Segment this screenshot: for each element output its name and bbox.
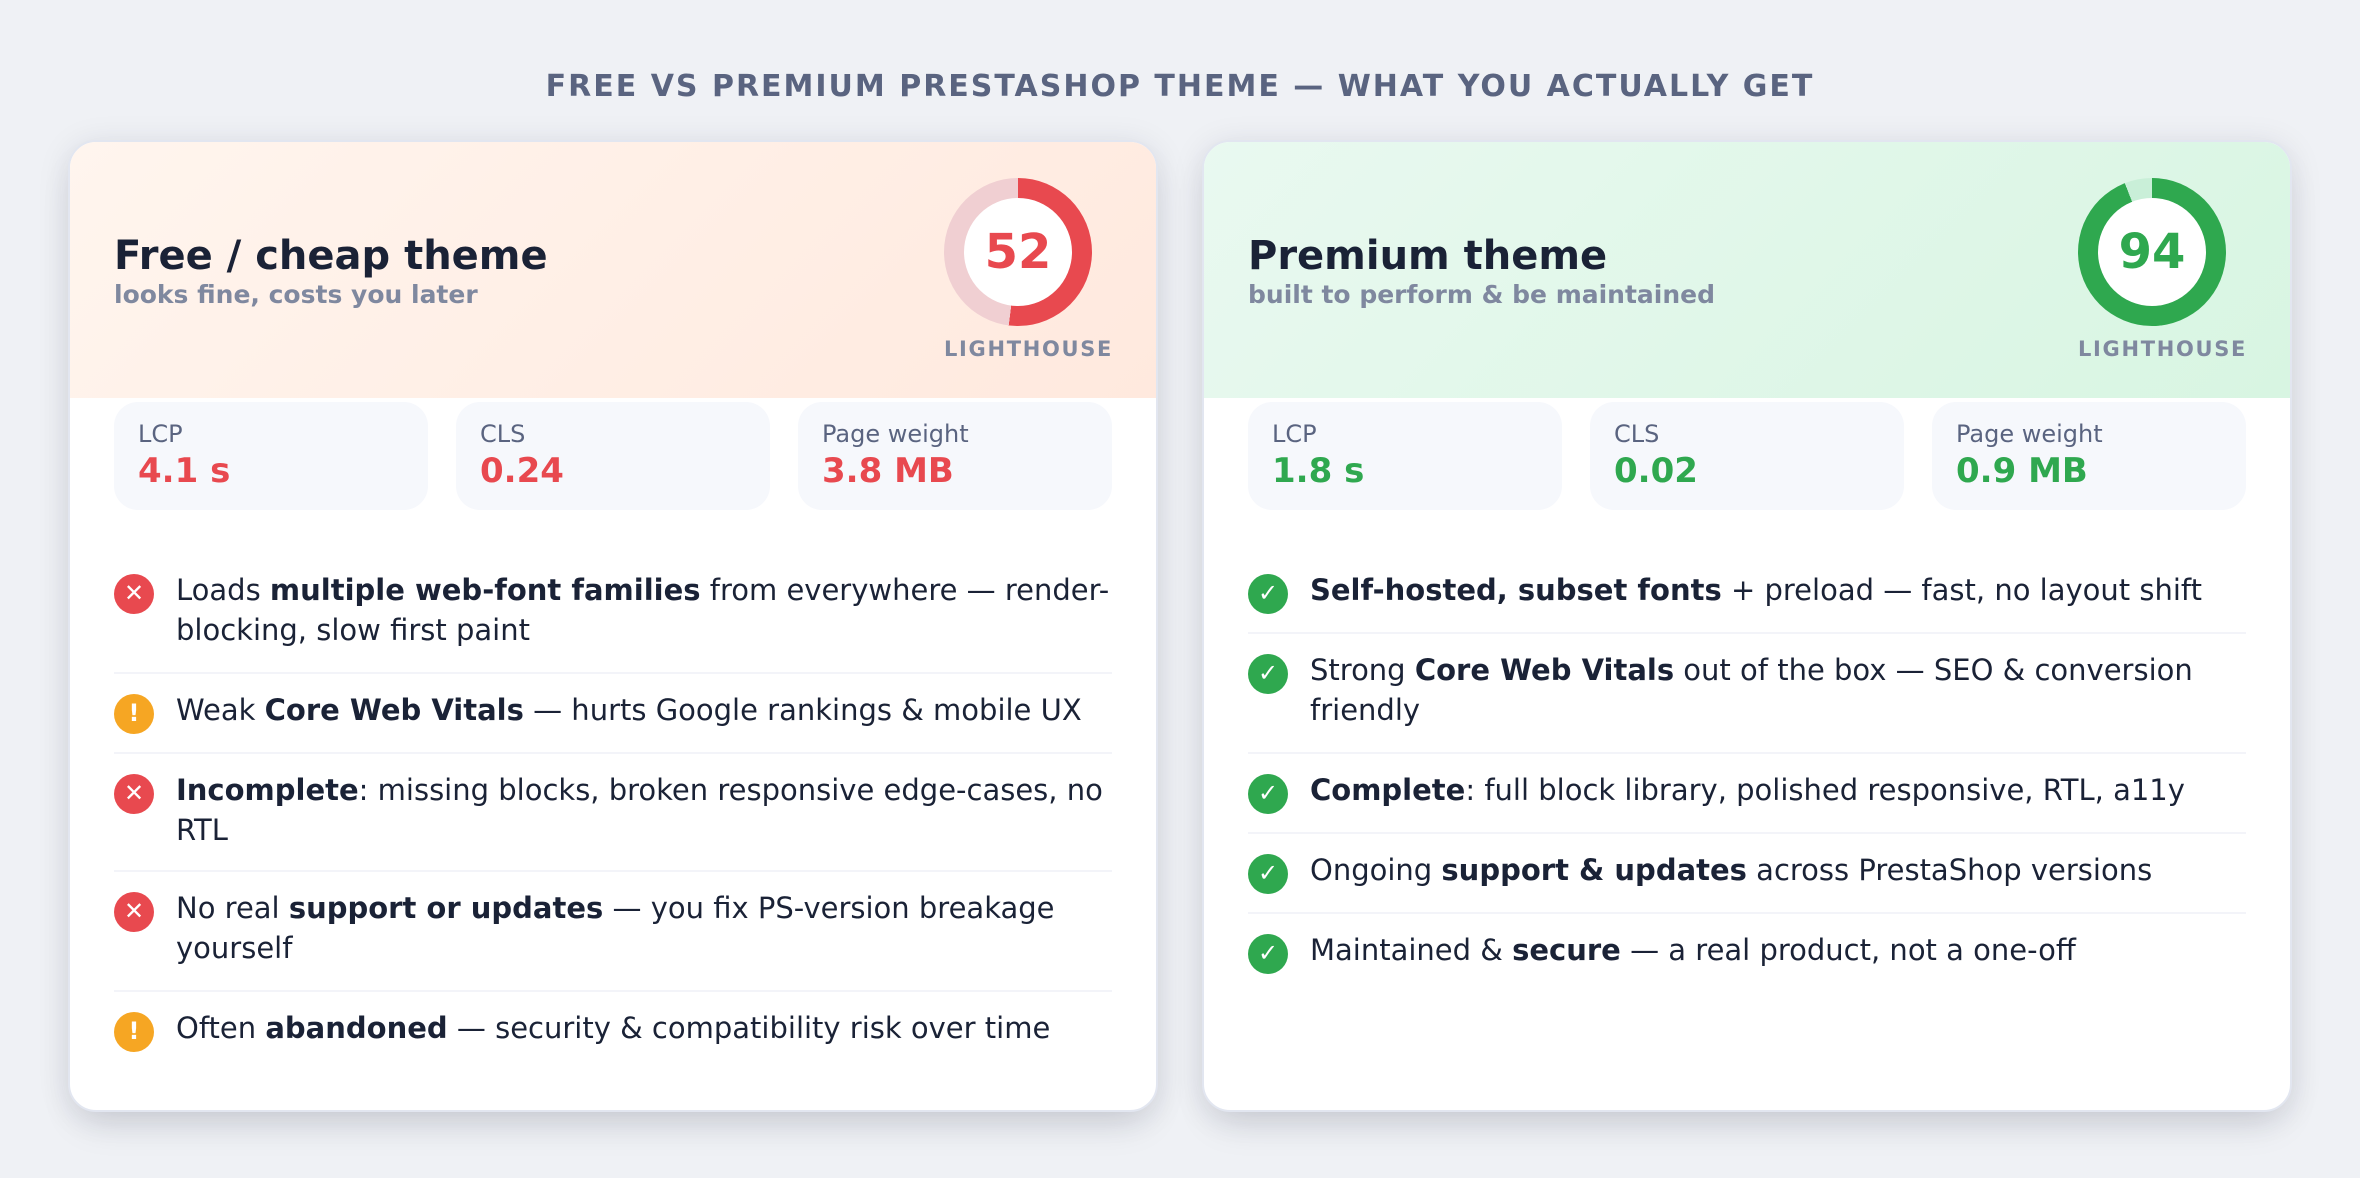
gauge: Lighthouse 94: 94 (2119, 224, 2185, 280)
text: web fonts: blocking, slow first paint (176, 613, 530, 647)
icon: check (1248, 774, 1288, 814)
icon: check: ✓ (1258, 579, 1278, 607)
icon: cross (114, 892, 154, 932)
text: incomplete (176, 773, 1103, 847)
gauge label: LIGHTHOUSE (944, 337, 1113, 361)
metric: CLS (1590, 402, 1904, 510)
metric: CLS: CLS (480, 420, 525, 448)
icon: cross: ✕ (124, 897, 144, 925)
icon: check (1248, 654, 1288, 694)
metric: LCP: LCP (138, 420, 183, 448)
icon: check: ✓ (1258, 659, 1278, 687)
metric: CLS: 0.24 (480, 451, 564, 491)
text: support: Ongoing support & updates across PrestaShop versions (1310, 853, 2152, 887)
metric: page weight (1932, 402, 2246, 510)
metric: page weight: Page weight (1956, 420, 2103, 448)
text: support (176, 891, 1055, 965)
text: abandoned: Often abandoned — security & compatibility risk over time (176, 1011, 1050, 1045)
gauge: Lighthouse 52 (944, 178, 1092, 326)
icon: check: ✓ (1258, 859, 1278, 887)
text: core web vitals (1310, 653, 2193, 727)
icon: cross (114, 574, 154, 614)
text: complete: Complete: full block library, polished responsive, RTL, a11y (1310, 773, 2185, 807)
subheading: free theme: looks fine, costs you later (114, 280, 478, 309)
gauge: Lighthouse 52: 52 (985, 224, 1051, 280)
icon: check: ✓ (1258, 939, 1278, 967)
icon: check (1248, 934, 1288, 974)
metric: page weight: 3.8 MB (822, 451, 954, 491)
heading: free theme: Free / cheap theme (114, 233, 548, 279)
text: support: No real support or updates — you fix PS-version breakage (176, 891, 1055, 925)
gauge label: LIGHTHOUSE (2078, 337, 2247, 361)
icon: cross: ✕ (124, 579, 144, 607)
metric: page weight (798, 402, 1112, 510)
panel header: premium theme (1204, 142, 2290, 398)
metric: LCP: LCP (1272, 420, 1317, 448)
metric: LCP (114, 402, 428, 510)
icon: cross: ✕ (124, 779, 144, 807)
gauge: Lighthouse 94 (2078, 178, 2226, 326)
icon: warning (114, 694, 154, 734)
text: support: yourself (176, 931, 292, 965)
icon: warning: ! (129, 699, 139, 727)
icon: warning (114, 1012, 154, 1052)
text: web fonts: Loads multiple web-font families from everywhere — render- (176, 573, 1109, 607)
panel: premium theme card (1202, 140, 2292, 1112)
icon: check: ✓ (1258, 779, 1278, 807)
metric: LCP: 4.1 s (138, 451, 230, 491)
metric: page weight: 0.9 MB (1956, 451, 2088, 491)
metric: CLS: CLS (1614, 420, 1659, 448)
subheading: premium theme: built to perform & be maintained (1248, 280, 1715, 309)
metric: page weight: Page weight (822, 420, 969, 448)
icon: check (1248, 574, 1288, 614)
panel header: free theme (70, 142, 1156, 398)
heading: premium theme: Premium theme (1248, 233, 1607, 279)
title: FREE VS PREMIUM PRESTASHOP THEME — WHAT YOU ACTUALLY GET (546, 69, 1814, 104)
text: secure: Maintained & secure — a real product, not a one-off (1310, 933, 2076, 967)
text: incomplete: Incomplete: missing blocks, broken responsive edge-cases, no (176, 773, 1103, 807)
metric: LCP: 1.8 s (1272, 451, 1364, 491)
panel: free theme card (68, 140, 1158, 1112)
text: core web vitals: friendly (1310, 693, 1420, 727)
metric: LCP (1248, 402, 1562, 510)
metric: CLS (456, 402, 770, 510)
icon: check (1248, 854, 1288, 894)
text: core web vitals: Strong Core Web Vitals out of the box — SEO & conversion (1310, 653, 2193, 687)
metric: CLS: 0.02 (1614, 451, 1698, 491)
text: core web vitals: Weak Core Web Vitals — hurts Google rankings & mobile UX (176, 693, 1082, 727)
text: web fonts (176, 573, 1109, 647)
text: fonts: Self-hosted, subset fonts + preload — fast, no layout shift (1310, 573, 2202, 607)
icon: cross (114, 774, 154, 814)
icon: warning: ! (129, 1017, 139, 1045)
text: incomplete: RTL (176, 813, 228, 847)
